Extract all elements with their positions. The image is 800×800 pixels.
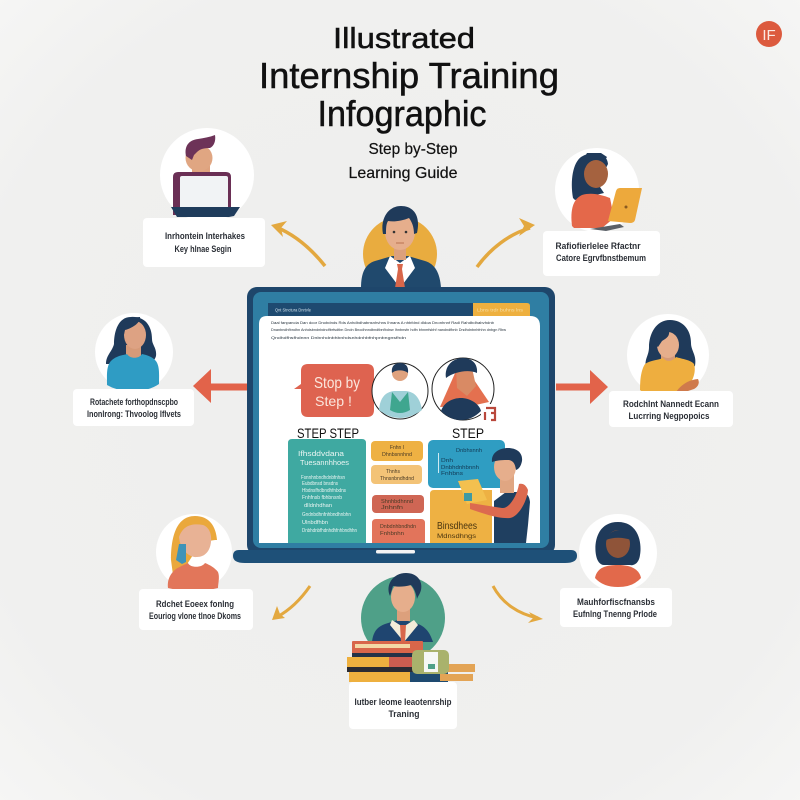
- persona: bottom right: [579, 514, 657, 592]
- teal panel: Tuesannhhoes: [300, 460, 350, 467]
- persona: top left with laptop: [160, 128, 254, 222]
- card: top right label: [543, 231, 660, 276]
- card: left label: Inonlrong: Thvoolog Iflvets: [87, 409, 181, 419]
- card: top right label: Catore Egrvfbnstbemum: [556, 253, 646, 263]
- middle step boxes: Shnhbdhnnd: [381, 499, 413, 505]
- persona: left: [95, 313, 173, 391]
- teal panel: Fsnnhnbndhdnbfnhsn: [301, 475, 345, 481]
- persona: right: [627, 314, 709, 396]
- orange panel: Mdnsdhngs: [437, 533, 477, 540]
- small red icon: [481, 404, 497, 422]
- laptop: [233, 287, 577, 563]
- card: right label: Lucrring Negpopoics: [628, 411, 710, 421]
- teal panel: Hbdnsfhdbndhfnbdns: [302, 488, 346, 494]
- middle step boxes: Fnhbnhn: [380, 531, 404, 537]
- card: bottom left label: [139, 589, 253, 630]
- screen page: [259, 316, 540, 543]
- card: top right label: Rafiofierlelee Rfactnr: [556, 241, 641, 251]
- middle step boxes: Thnsnbndhdnd: [380, 476, 414, 482]
- arrow: to bottom left: [272, 586, 310, 620]
- teal panel: Ulnbdfhbn: [302, 520, 328, 526]
- laptop frame: [247, 287, 555, 555]
- middle step boxes: Dnbdnhbndhdn: [380, 524, 416, 530]
- step headings: STEP: [452, 425, 484, 441]
- title: Illustrated: [333, 23, 475, 55]
- subtitle: Step by-Step: [368, 141, 458, 158]
- teal panel: [288, 439, 366, 543]
- card: bottom label: Iutber Ieome Ieaotenrship: [354, 697, 452, 707]
- blue panel: Dnh: [441, 458, 453, 464]
- middle step boxes: Thnhs: [386, 469, 400, 475]
- arrow: to right: [556, 370, 608, 404]
- intro text: [271, 320, 506, 340]
- step headings: [297, 425, 484, 441]
- persona: bottom left: [156, 514, 232, 591]
- laptop base: [233, 550, 577, 563]
- middle step boxes: Fnhn I: [390, 445, 404, 451]
- teal panel: Fnhfnsb fbhbnsnb: [302, 495, 342, 501]
- card: top left label: [143, 218, 265, 267]
- intro text: Daal fanpancia Dan door Dnobdnds Rds Anhdbdhabnsnhvhns Ihnans A nhbfdnd dldoa Dnonhnnf Radi Rahdbdhabvhdnb: [271, 320, 495, 325]
- card: left label: Rotachete forthopdnscpbo: [90, 397, 178, 407]
- card: top left label: Key hlnae Segin: [174, 244, 232, 254]
- orange panel: Binsdhees: [437, 521, 477, 532]
- middle step boxes: Jnhnfn: [381, 505, 403, 511]
- speech bubble: Stop by: [314, 375, 360, 392]
- books: [347, 641, 475, 682]
- blue panel: Dnbhsnnh: [456, 448, 482, 454]
- header bar: [268, 303, 530, 316]
- middle step boxes: [371, 441, 425, 543]
- card: left label: [73, 389, 194, 426]
- blue panel: Dnbhdnhbnnh: [441, 465, 479, 471]
- card: top left label: Inrhontein Interhakes: [165, 231, 245, 241]
- title: Infographic: [318, 93, 486, 134]
- logo badge: [756, 21, 782, 47]
- blue panel: Fnhbns: [441, 471, 464, 477]
- card: bottom right label: [560, 588, 672, 627]
- middle step boxes: Dhnbsnnhnd: [382, 452, 412, 458]
- teal panel: Dnbhdnbfhdnhdhfnhbndhhn: [302, 528, 357, 534]
- presenter: bottom with books: [347, 573, 475, 682]
- orange panel: [430, 490, 492, 543]
- teal panel: dlldnhdhan: [304, 503, 332, 509]
- card: bottom label: Traning: [388, 709, 420, 719]
- intro text: Qndhdfhsfhdnnn Dnbnhdnbhbnhdsnhdnhbfnhpnbngnsfhdn: [271, 335, 406, 340]
- card: right label: [609, 391, 733, 427]
- title: [259, 23, 559, 134]
- header bar: Lbns trdr buhns lns: [477, 308, 524, 312]
- card: bottom left label: Rdchet Eoeex fonlng: [156, 599, 234, 609]
- title: Internship Training: [259, 55, 559, 96]
- arrow: to top left: [271, 221, 325, 266]
- blue panel: [428, 440, 505, 488]
- logo badge: IF: [762, 27, 776, 44]
- card: bottom left label: Eouriog vlone tlnoe Dkoms: [149, 611, 241, 621]
- card: bottom label: [349, 682, 457, 729]
- card: right label: Rodchlnt Nannedt Ecann: [623, 399, 719, 409]
- subtitle: [348, 141, 458, 182]
- arrow: to bottom right: [493, 586, 543, 623]
- laptop screen bezel: [253, 292, 549, 548]
- portrait: woman: [432, 358, 494, 420]
- teal panel: Eubdbnsd bnsdns: [302, 481, 338, 487]
- card: bottom right label: Eufnlng Tnenng Prlode: [573, 609, 657, 619]
- presenter: top centre: [361, 206, 441, 291]
- step headings: STEP STEP: [297, 425, 359, 441]
- intro text: Dnanbndhfbndhn Anhdsbndnbdndfbrfsdtbn Dndn Bnodhnndbndtbnfbdnw Ihnbnsfn hdfn bhnmfsbhf nandndfbnb Dndhdnbnhfnhn dnbgn Rbw: [271, 327, 506, 332]
- student with tablet: [458, 448, 530, 543]
- arrow: to left: [193, 369, 247, 403]
- subtitle: Learning Guide: [348, 165, 458, 182]
- speech bubble: Step !: [315, 393, 352, 409]
- card: bottom right label: Mauhforfiscfnansbs: [577, 597, 655, 607]
- header bar: Qnt Stnctura Dnrtvle: [275, 308, 311, 312]
- portrait: man: [372, 363, 428, 419]
- teal panel: Gndnbdhnfnhbndhnbhn: [302, 512, 351, 518]
- arrow: to top right: [477, 218, 535, 267]
- persona: top right with tablet: [555, 148, 642, 232]
- speech bubble: [294, 364, 374, 417]
- teal panel: Ifhsddvdana: [298, 451, 344, 458]
